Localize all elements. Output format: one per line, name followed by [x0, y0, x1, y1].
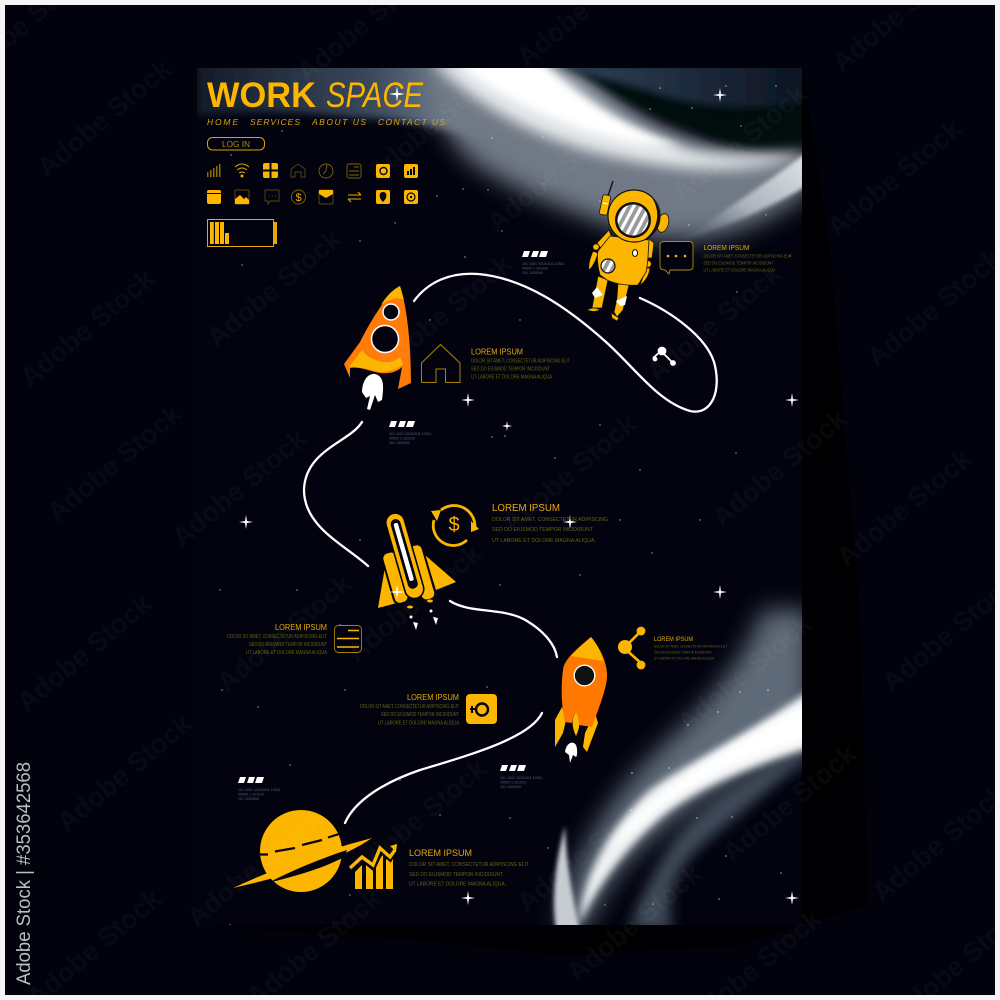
text block: shuttle: LOREM IPSUM — [492, 503, 560, 514]
text block: astronaut: UT LABORE ET DOLORE MAGNA ALIQUA — [704, 268, 776, 272]
icon: dollar cycle: $ — [448, 514, 460, 536]
text block: list: SED DO EIUSMOD TEMPOR INCIDIDUNT — [249, 642, 327, 648]
icon: dollar cycle — [431, 505, 479, 545]
icon: wifi — [235, 164, 249, 177]
icon: share nodes — [618, 627, 645, 669]
rocket nose — [571, 637, 603, 661]
watermarks: Adobe Stock — [496, 408, 643, 538]
text block: list: DOLOR SIT AMET, CONSECTETUR ADIPISCING ELIT — [227, 634, 327, 640]
text block: camera: UT LABORE ET DOLORE MAGNA ALIQUA — [378, 720, 460, 726]
watermarks: Adobe Stock — [706, 403, 853, 533]
watermarks: Adobe Stock — [716, 738, 863, 868]
shuttle exhaust — [407, 600, 438, 630]
binary block: bottom right: 101 1000000 — [500, 785, 521, 789]
astronaut: torso — [597, 236, 649, 285]
flight path curves — [304, 274, 717, 823]
watermarks: Adobe Stock — [341, 538, 488, 668]
navigation: SERVICES — [250, 117, 300, 127]
text block: share — [654, 637, 728, 660]
icon: camera tile — [466, 694, 497, 724]
title: WORK — [207, 76, 316, 115]
watermarks: Adobe Stock — [201, 223, 348, 353]
text block: shuttle — [492, 503, 608, 544]
astronaut — [587, 181, 671, 321]
binary block: middle: 101 1001 10101011 10011 — [389, 432, 431, 436]
binary block: middle: 101 1000000 — [389, 441, 410, 445]
shuttle — [378, 511, 456, 630]
text block: shuttle: UT LABORE ET DOLORE MAGNA ALIQUA. — [492, 538, 596, 544]
text block: planet: DOLOR SIT AMET, CONSECTETUR ADIPISCING ELIT — [409, 862, 529, 868]
icon: target tile — [404, 190, 418, 204]
navigation — [207, 119, 445, 125]
binary block: bottom left: 101 1000000 — [238, 797, 259, 801]
text block: astronaut: LOREM IPSUM — [704, 245, 750, 252]
sparkle over title — [389, 86, 405, 102]
shuttle body — [383, 511, 426, 601]
icon: list — [347, 164, 361, 178]
aurora: bottom — [554, 610, 810, 930]
icon: picture — [235, 190, 249, 204]
text block: planet: UT LABORE ET DOLORE MAGNA ALIQUA. — [409, 882, 506, 888]
poster drop shadow — [205, 70, 868, 955]
icon: pin tile — [376, 190, 390, 204]
binary block: bottom right — [500, 765, 542, 789]
title — [207, 82, 424, 108]
rocket window — [574, 665, 595, 686]
text block: camera: SED DO EIUSMOD TEMPOR INCIDIDUNT — [381, 712, 459, 718]
poster — [197, 60, 810, 930]
title: SPACE — [326, 76, 424, 115]
text block: astronaut: SED DO EIUSMOD TEMPOR INCIDIDUNT — [704, 260, 774, 266]
icon: list box — [334, 626, 362, 652]
battery icon — [208, 220, 277, 246]
text block: share: UT LABORE ET DOLORE MAGNA ALIQUA — [654, 656, 715, 660]
icon: home — [291, 164, 305, 177]
binary block: top: 101 1000000 — [522, 271, 543, 275]
text block: planet — [409, 848, 529, 888]
planet disc — [260, 810, 342, 892]
navigation: ABOUT US — [311, 117, 366, 127]
astronaut: antenna radio — [599, 181, 613, 216]
astronaut: chest patch — [601, 250, 638, 273]
icon: house outline — [422, 344, 460, 382]
text block: camera — [360, 693, 460, 726]
login button: LOG IN — [222, 139, 250, 149]
watermarks: Adobe Stock — [371, 248, 518, 378]
login button — [208, 138, 264, 150]
rocket band — [349, 350, 403, 372]
binary block: middle — [389, 421, 431, 445]
icon: clock — [319, 164, 333, 178]
text block: shuttle: DOLOR SIT AMET, CONSECTETUR ADIPISCING — [492, 517, 608, 523]
sparkle on shuttle — [389, 585, 405, 599]
big sparkle stars — [239, 88, 799, 905]
icon grid — [207, 163, 418, 204]
rocket nose — [381, 286, 404, 305]
icon: wallet — [207, 190, 221, 204]
text block: astronaut — [704, 245, 792, 272]
watermarks: Adobe Stock — [561, 858, 708, 988]
text block: planet: LOREM IPSUM — [409, 848, 472, 858]
icon: growth chart — [350, 844, 397, 889]
watermarks: Adobe Stock — [481, 108, 628, 238]
watermarks: Adobe Stock — [11, 588, 158, 718]
rocket body — [344, 286, 411, 389]
text block: rocket one: DOLOR SIT AMET, CONSECTETUR ADIPISCING ELIT — [471, 358, 570, 364]
text block: list — [227, 623, 328, 656]
icon: camera tile — [376, 164, 390, 178]
icon: chat — [265, 190, 279, 204]
astronaut: arms — [589, 230, 654, 285]
text block: rocket one — [471, 348, 570, 380]
rocket windows — [372, 304, 399, 352]
text block: rocket one: UT LABORE ET DOLORE MAGNA ALIQUA — [471, 374, 553, 380]
text block: planet: SED DO EIUSMOD TEMPOR INCIDIDUNT — [409, 872, 503, 878]
shuttle boosters — [381, 543, 437, 605]
text block: share: SED DO EIUSMOD TEMPOR INCIDIDUNT — [654, 650, 713, 654]
binary block: top: 101 1001 10101011 10011 — [522, 262, 564, 266]
sparkle near shuttle text — [563, 515, 577, 529]
watermarks: Adobe Stock — [671, 608, 818, 738]
navigation: HOME — [207, 117, 238, 127]
icon: plus tile — [263, 163, 278, 178]
watermarks: Adobe Stock — [166, 423, 313, 553]
text block: camera: LOREM IPSUM — [407, 693, 459, 702]
watermarks: Adobe Stock — [511, 788, 658, 918]
planet ring — [233, 838, 372, 888]
planet ring gap — [268, 850, 347, 883]
icon: mail — [319, 190, 333, 204]
text block: rocket one: SED DO EIUSMOD TEMPOR INCIDIDUNT — [471, 366, 550, 372]
watermarks: Adobe Stock — [51, 708, 198, 838]
text block: camera: DOLOR SIT AMET, CONSECTETUR ADIPISCING ELIT — [360, 704, 459, 710]
watermarks: Adobe Stock — [211, 568, 358, 698]
watermarks: Adobe Stock — [14, 263, 161, 393]
binary block: bottom left: 101 1001 10101011 10011 — [238, 788, 280, 792]
watermarks: Adobe Stock — [31, 53, 178, 183]
binary block: bottom right: 101 1001 10101011 10011 — [500, 776, 542, 780]
text block: share: LOREM IPSUM — [654, 637, 693, 643]
rocket body — [562, 637, 607, 727]
binary block: top — [522, 251, 564, 275]
watermarks: Adobe Stock — [666, 78, 813, 208]
text block: astronaut: DOLOR SIT AMET, CONSECTETUR ADIPISCING ELIT — [704, 254, 792, 258]
astronaut: backpack lobe — [657, 213, 670, 233]
rocket one — [344, 286, 411, 410]
binary block: bottom right: 00000 1 101010 — [500, 780, 526, 784]
rocket fins — [555, 707, 598, 752]
binary block: top: 00000 1 101010 — [522, 266, 548, 270]
planet — [233, 810, 372, 892]
small stars — [219, 85, 791, 926]
text block: list: UT LABORE ET DOLORE MAGNA ALIQUA — [246, 650, 328, 656]
aurora: top — [197, 60, 810, 240]
icon: dollar: $ — [295, 192, 302, 204]
icon: signal — [207, 164, 220, 177]
stock id side text: Adobe Stock | #353642568 — [14, 762, 35, 985]
icon: dollar — [292, 190, 306, 204]
binary block: bottom left — [238, 777, 280, 801]
watermarks: Adobe Stock — [181, 803, 328, 933]
binary block: bottom left: 00000 1 101010 — [238, 792, 264, 796]
watermarks: Adobe Stock — [641, 258, 788, 388]
rocket flame — [565, 743, 577, 763]
shuttle wings — [378, 555, 456, 608]
text block: rocket one: LOREM IPSUM — [471, 348, 523, 356]
watermarks: Adobe Stock — [821, 113, 968, 243]
rocket three — [555, 637, 607, 763]
text block: share: DOLOR SIT AMET, CONSECTETUR ADIPISCING ELIT — [654, 644, 728, 648]
icon: chart tile — [404, 164, 418, 178]
astronaut: legs — [587, 276, 629, 321]
binary block: middle: 00000 1 101010 — [389, 436, 415, 440]
icon: molecule node — [653, 348, 675, 365]
navigation: CONTACT US — [378, 117, 445, 127]
planet dashes — [260, 834, 339, 854]
rocket flame — [362, 374, 383, 410]
icon: swap arrows — [348, 192, 361, 202]
watermarks: Adobe Stock — [41, 398, 188, 528]
watermarks: Adobe Stock — [361, 58, 508, 188]
astronaut: helmet — [608, 190, 660, 242]
watermarks: Adobe Stock — [346, 753, 493, 883]
text block: list: LOREM IPSUM — [275, 623, 327, 632]
chat icon — [660, 242, 693, 274]
text block: shuttle: SED DO EIUSMOD TEMPOR INCIDIDUNT — [492, 527, 593, 533]
watermarks: Adobe Stock — [831, 443, 978, 573]
